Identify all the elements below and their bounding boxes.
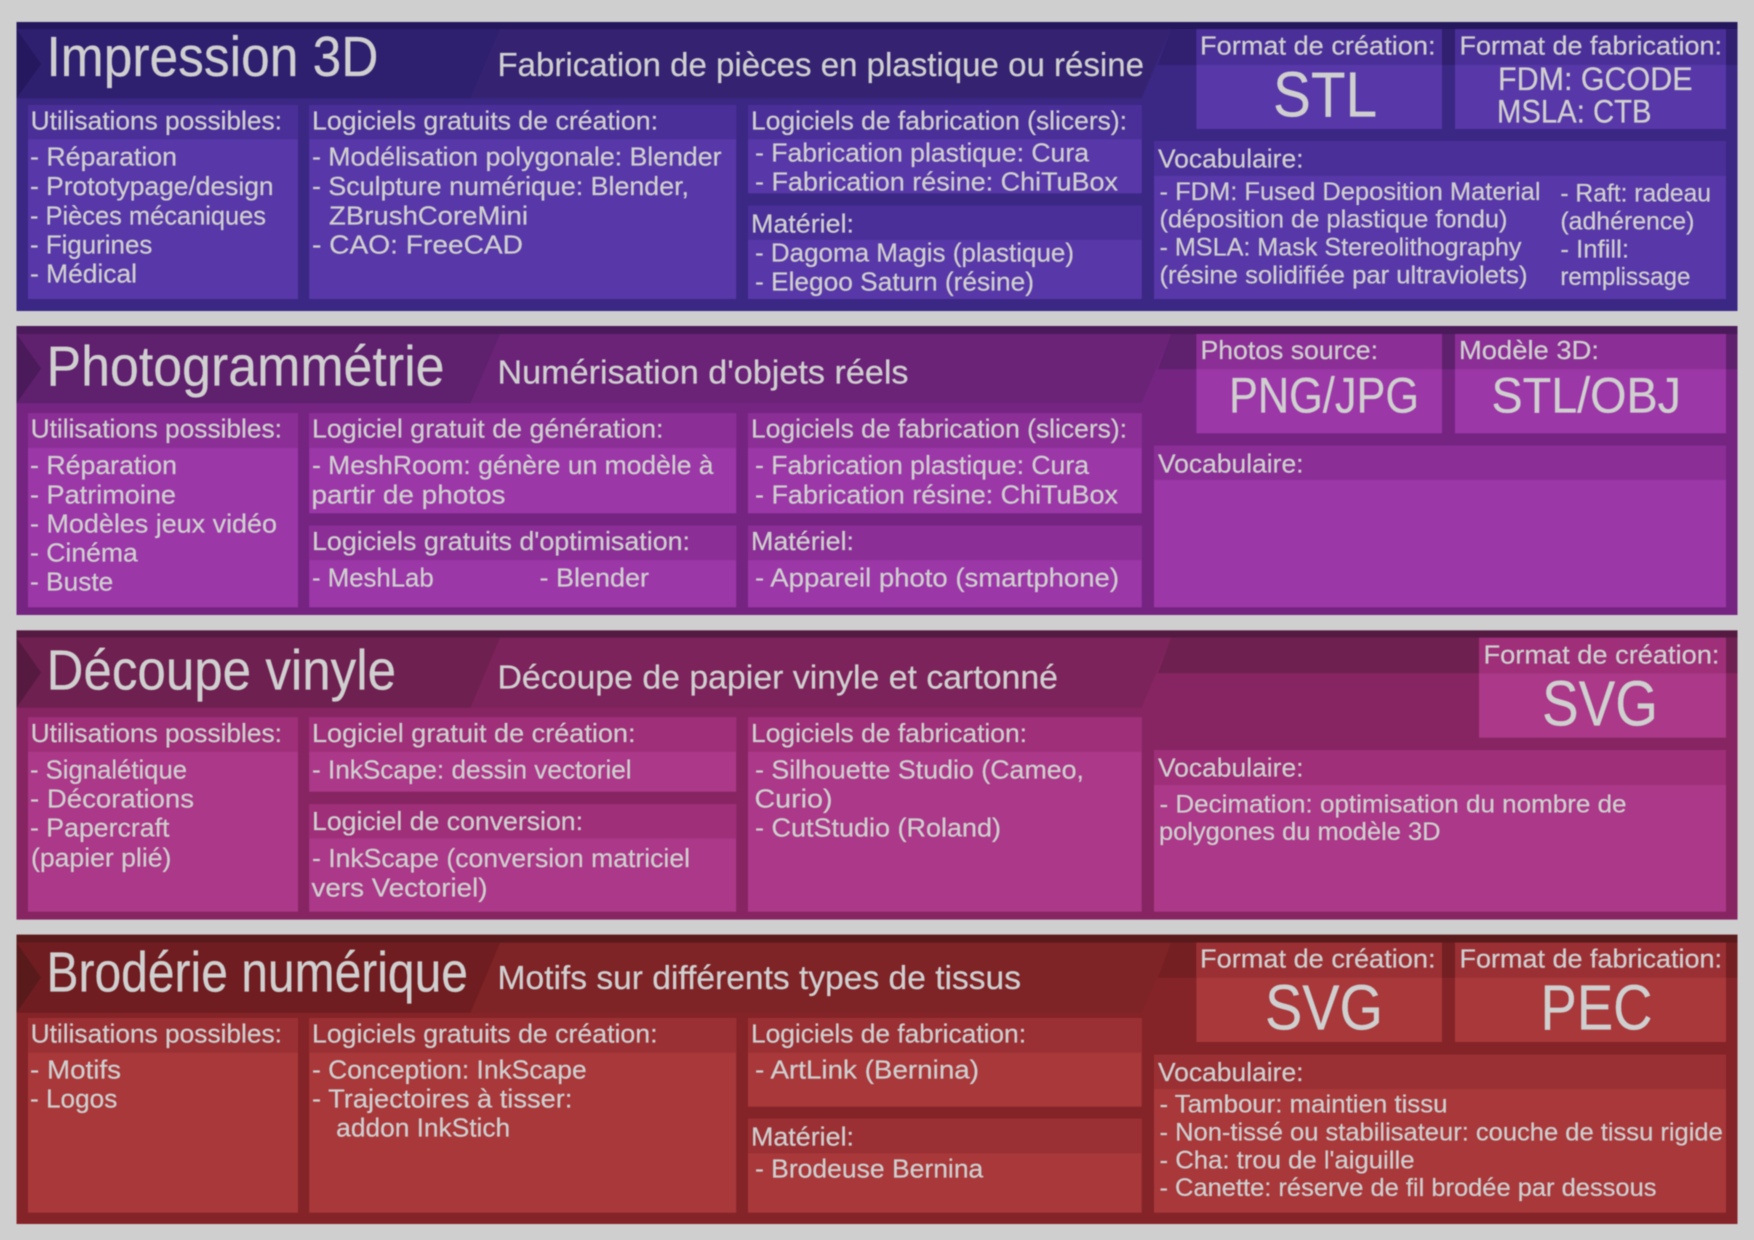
box: matériel: Matériel: — [751, 526, 854, 556]
box: utilisations possibles: - Signalétique — [30, 754, 187, 784]
box: logiciels de fabrication — [748, 105, 1142, 197]
box: vocabulaire: - Raft: radeau — [1560, 180, 1711, 208]
box: vocabulaire: - FDM: Fused Deposition Material — [1160, 178, 1540, 206]
box: matériel: - Brodeuse Bernina — [755, 1153, 984, 1183]
box: format de création — [1479, 638, 1726, 740]
subtitle: Numérisation d'objets réels — [498, 353, 908, 390]
box: logiciels gratuits de création: - Sculpture numérique: Blender, — [312, 171, 689, 201]
box: utilisations possibles: - Prototypage/design — [30, 171, 274, 201]
panel: Découpe vinyle — [16, 630, 1738, 920]
box: logiciels de fabrication — [748, 413, 1142, 513]
box: format de fabrication: Format de fabrication: — [1460, 944, 1722, 974]
box: logiciel de conversion: vers Vectoriel) — [312, 872, 488, 902]
box: logiciels gratuits de création: Logiciels gratuits de création: — [312, 105, 658, 135]
box: utilisations possibles: - Figurines — [30, 229, 152, 259]
box: matériel: - Appareil photo (smartphone) — [755, 563, 1119, 593]
icon: chevron — [16, 638, 41, 708]
box: format de fabrication — [1455, 29, 1726, 130]
box: logiciels gratuits de création — [309, 105, 736, 299]
box: format de création: SVG — [1542, 668, 1658, 740]
subtitle: Fabrication de pièces en plastique ou résine — [498, 46, 1144, 83]
box: vocabulaire: - Non-tissé ou stabilisateur: couche de tissu rigide — [1160, 1119, 1723, 1147]
panel: Photogrammétrie — [16, 326, 1738, 615]
box: logiciels gratuits de création: - Trajectoires à tisser: — [312, 1083, 572, 1113]
subtitle: Motifs sur différents types de tissus — [498, 959, 1021, 996]
box: format de création: SVG — [1265, 971, 1383, 1043]
box: logiciels gratuits d'optimisation: - MeshLab — [312, 563, 434, 593]
box: logiciels de fabrication: - Fabrication plastique: Cura — [755, 138, 1090, 168]
box: logiciels de fabrication: - Silhouette Studio (Cameo, — [755, 754, 1084, 784]
box: format de création: Format de création: — [1484, 639, 1720, 669]
box: logiciels de fabrication: Logiciels de fabrication: — [751, 718, 1027, 748]
box: format de fabrication: PEC — [1540, 971, 1652, 1043]
box: utilisations possibles: - Logos — [30, 1083, 117, 1113]
box: matériel — [748, 1119, 1142, 1213]
box: format de fabrication — [1455, 943, 1726, 1043]
box: utilisations possibles: Utilisations possibles: — [31, 105, 282, 135]
box: logiciels de fabrication: - ArtLink (Bernina) — [755, 1054, 979, 1084]
box: utilisations possibles: - Médical — [30, 259, 137, 289]
box: format de création: Format de création: — [1200, 30, 1436, 60]
box: modèle 3D — [1455, 334, 1726, 433]
box: vocabulaire: polygones du modèle 3D — [1159, 818, 1440, 846]
box: matériel: - Elegoo Saturn (résine) — [755, 267, 1034, 297]
box: logiciels gratuits d'optimisation: Logiciels gratuits d'optimisation: — [312, 526, 690, 556]
box: format de création: STL — [1273, 59, 1377, 131]
box: logiciel de conversion: Logiciel de conversion: — [312, 806, 583, 836]
title band — [16, 638, 500, 708]
box: vocabulaire: (résine solidifiée par ultraviolets) — [1160, 261, 1528, 289]
box: vocabulaire — [1154, 750, 1726, 912]
box: logiciel gratuit de création — [309, 717, 736, 792]
box: vocabulaire — [1154, 141, 1726, 299]
box: logiciels de fabrication: - Fabrication résine: ChiTuBox — [755, 167, 1118, 197]
box: logiciels de fabrication: Logiciels de fabrication (slicers): — [751, 414, 1127, 444]
box: logiciel gratuit de génération — [309, 413, 736, 513]
box: logiciel gratuit de génération: - MeshRoom: génère un modèle à — [312, 450, 714, 480]
box: logiciels gratuits de création: - Modélisation polygonale: Blender — [312, 142, 722, 172]
panel: Brodérie numérique — [16, 935, 1738, 1224]
box: logiciel de conversion — [309, 804, 736, 912]
box: logiciels gratuits d'optimisation: - Blender — [540, 563, 649, 593]
box: vocabulaire: - Tambour: maintien tissu — [1160, 1091, 1448, 1119]
box: logiciel gratuit de génération: Logiciel gratuit de génération: — [312, 414, 664, 444]
title band — [16, 334, 500, 403]
box: format de fabrication: MSLA: CTB — [1497, 94, 1652, 130]
box: utilisations possibles: - Motifs — [30, 1054, 121, 1084]
box: vocabulaire: - Decimation: optimisation du nombre de — [1160, 790, 1626, 818]
box: logiciels de fabrication: Curio) — [754, 784, 832, 814]
title: Découpe vinyle — [46, 639, 396, 703]
icon: chevron — [16, 334, 41, 403]
box: format de création: Format de création: — [1200, 944, 1436, 974]
title band — [16, 943, 500, 1013]
box: utilisations possibles — [28, 413, 298, 607]
box: format de création — [1196, 29, 1442, 131]
box: logiciel gratuit de génération: partir de photos — [312, 479, 506, 509]
box: utilisations possibles: - Pièces mécaniques — [30, 200, 266, 230]
box: modèle 3D: Modèle 3D: — [1459, 335, 1599, 365]
box: utilisations possibles: Utilisations possibles: — [31, 1018, 282, 1048]
box: logiciels gratuits de création: - Conception: InkScape — [312, 1054, 587, 1084]
box: logiciels gratuits de création — [309, 1018, 736, 1213]
box: utilisations possibles — [28, 1018, 298, 1213]
box: matériel — [748, 526, 1142, 607]
box: format de fabrication: Format de fabrication: — [1460, 30, 1722, 60]
box: vocabulaire: - MSLA: Mask Stereolithography — [1160, 234, 1522, 262]
box: utilisations possibles: - Papercraft — [30, 813, 170, 843]
box: utilisations possibles: (papier plié) — [31, 842, 171, 872]
box: vocabulaire — [1154, 1055, 1726, 1213]
icon: chevron — [16, 29, 41, 98]
box: vocabulaire: Vocabulaire: — [1158, 144, 1304, 174]
box: vocabulaire — [1154, 446, 1726, 607]
box: logiciels gratuits de création: ZBrushCoreMini — [329, 200, 528, 230]
panel: Impression 3D — [16, 22, 1738, 311]
box: logiciels gratuits de création: - CAO: FreeCAD — [312, 229, 523, 259]
box: logiciels gratuits de création: Logiciels gratuits de création: — [312, 1018, 658, 1048]
box: logiciels gratuits d'optimisation — [309, 526, 736, 607]
box: vocabulaire: - Cha: trou de l'aiguille — [1160, 1146, 1414, 1174]
box: logiciels de fabrication: Logiciels de fabrication: — [751, 1018, 1026, 1048]
box: utilisations possibles: - Patrimoine — [30, 479, 176, 509]
box: matériel — [748, 206, 1142, 299]
box: utilisations possibles: - Décorations — [30, 784, 194, 814]
box: logiciel de conversion: - InkScape (conversion matriciel — [312, 843, 690, 873]
box: vocabulaire: Vocabulaire: — [1158, 753, 1304, 783]
box: modèle 3D: STL/OBJ — [1492, 367, 1681, 423]
box: utilisations possibles: - Modèles jeux vidéo — [30, 508, 277, 538]
box: utilisations possibles: - Buste — [30, 567, 113, 597]
box: logiciels de fabrication: - Fabrication plastique: Cura — [755, 450, 1090, 480]
box: logiciels de fabrication: - CutStudio (Roland) — [755, 813, 1001, 843]
box: vocabulaire: - Canette: réserve de fil brodée par dessous — [1160, 1174, 1656, 1202]
box: utilisations possibles — [28, 105, 298, 299]
subtitle: Découpe de papier vinyle et cartonné — [498, 658, 1058, 696]
box: vocabulaire: Vocabulaire: — [1158, 1057, 1304, 1087]
box: vocabulaire: Vocabulaire: — [1158, 449, 1304, 479]
box: utilisations possibles: - Réparation — [30, 450, 177, 480]
box: utilisations possibles: Utilisations possibles: — [31, 414, 282, 444]
box: utilisations possibles: Utilisations possibles: — [31, 718, 282, 748]
box: logiciels de fabrication — [748, 1018, 1142, 1107]
box: photos source — [1196, 334, 1442, 433]
box: matériel: Matériel: — [751, 1122, 854, 1152]
box: format de fabrication: FDM: GCODE — [1498, 61, 1692, 97]
box: logiciels de fabrication: Logiciels de fabrication (slicers): — [751, 105, 1127, 135]
box: logiciel gratuit de création: Logiciel gratuit de création: — [312, 718, 636, 748]
box: logiciels gratuits de création: addon InkStich — [336, 1113, 510, 1143]
box: logiciels de fabrication — [748, 717, 1142, 912]
box: logiciel gratuit de création: - InkScape: dessin vectoriel — [312, 754, 632, 784]
box: photos source: Photos source: — [1200, 335, 1378, 365]
box: utilisations possibles — [28, 717, 298, 912]
box: matériel: Matériel: — [751, 209, 854, 239]
box: photos source: PNG/JPG — [1229, 367, 1419, 423]
title: Brodérie numérique — [46, 940, 468, 1004]
title band — [16, 29, 500, 98]
box: format de création — [1196, 943, 1442, 1043]
box: vocabulaire: (adhérence) — [1560, 207, 1694, 235]
box: vocabulaire: - Infill: — [1560, 235, 1629, 263]
box: vocabulaire: (déposition de plastique fondu) — [1160, 206, 1508, 234]
box: matériel: - Dagoma Magis (plastique) — [755, 238, 1074, 268]
title: Impression 3D — [46, 25, 378, 89]
icon: chevron — [16, 943, 41, 1013]
box: vocabulaire: remplissage — [1560, 263, 1690, 291]
box: utilisations possibles: - Réparation — [30, 142, 177, 172]
box: utilisations possibles: - Cinéma — [30, 538, 138, 568]
box: logiciels de fabrication: - Fabrication résine: ChiTuBox — [755, 479, 1118, 509]
title: Photogrammétrie — [46, 334, 444, 398]
